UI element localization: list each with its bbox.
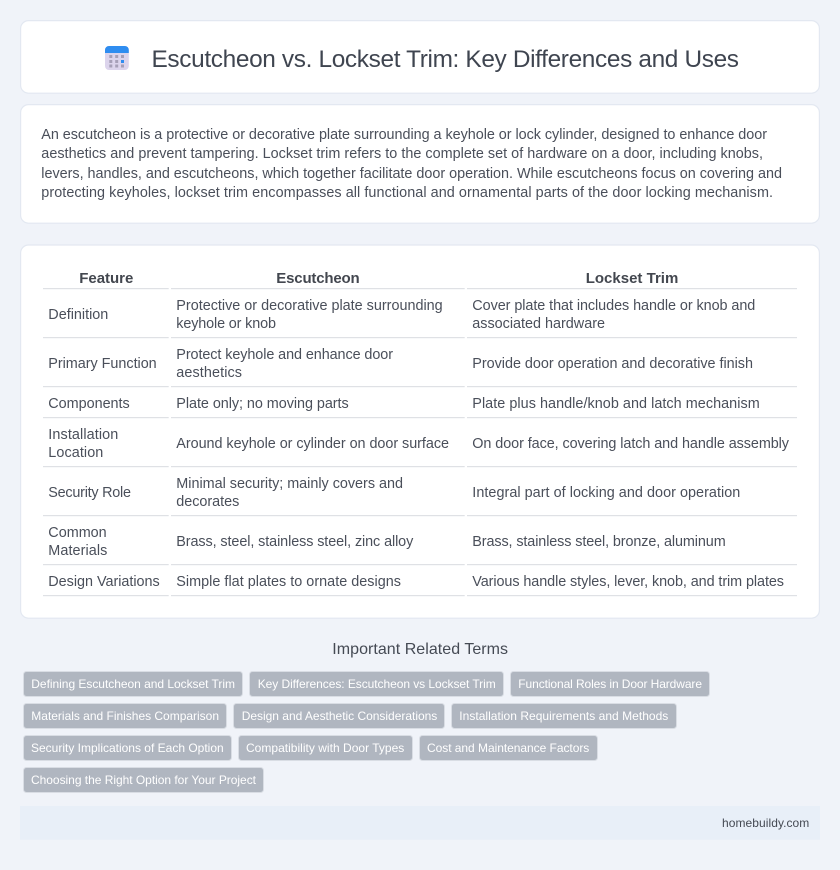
tag: security: Security Implications of Each Option [31,741,224,755]
row: security role [48,476,740,510]
panel: title card [21,21,819,93]
row: definition [48,298,755,332]
tag: materials: Materials and Finishes Comparison [31,709,219,723]
row: primary function: Primary Function [48,356,157,372]
row: components [48,396,760,412]
row: common materials: Brass, stainless steel, bronze, aluminum [472,534,726,550]
tag: materials [24,704,226,728]
intro paragraph [41,127,782,201]
row: definition: Definition [48,307,108,323]
row: components: Components [48,396,130,412]
footer [20,806,820,840]
row: primary function: Provide door operation and decorative finish [472,356,753,372]
row: definition: keyhole or knob [176,316,276,332]
tag: key differences: Key Differences: Escutcheon vs Lockset Trim [258,677,496,691]
tag: design: Design and Aesthetic Considerations [242,709,437,723]
tag: functional roles: Functional Roles in Door Hardware [518,677,702,691]
related term tags [24,672,710,792]
intro paragraph: An escutcheon is a protective or decorative plate surrounding a keyhole or lock cylinder, designed to enhance door [41,127,767,143]
table header: Feature [79,270,133,287]
intro paragraph: levers, handles, and escutcheons, which together facilitate door operation. While escutcheons focus on covering and [41,166,782,182]
title: Escutcheon vs. Lockset Trim: Key Differences and Uses [152,46,739,73]
row: installation location: Installation [48,427,118,443]
tag: defining [24,672,242,696]
table header: Lockset Trim [586,270,678,287]
tag: cost [420,736,598,760]
row: components: Plate plus handle/knob and latch mechanism [472,396,760,412]
icon: calendar [105,46,129,70]
row: common materials: Materials [48,543,107,559]
tag: installation [452,704,676,728]
table header [79,270,678,287]
tag: compatibility [238,736,412,760]
tag: functional roles [510,672,710,696]
row: security role: Minimal security; mainly covers and [176,476,403,492]
row: common materials [48,525,726,559]
related terms heading: Important Related Terms [332,641,508,658]
row: common materials: Common [48,525,107,541]
tag: security [24,736,232,760]
tag: cost: Cost and Maintenance Factors [427,741,589,755]
row: design variations [48,574,784,590]
row: primary function: aesthetics [176,365,242,381]
row: design variations: Design Variations [48,574,160,590]
row: installation location [48,427,790,461]
table header: Escutcheon [276,270,360,287]
panel: introduction [21,105,819,223]
row: definition: Cover plate that includes handle or knob and [472,298,755,314]
tag: compatibility: Compatibility with Door Types [246,741,404,755]
row: design variations: Various handle styles, lever, knob, and trim plates [472,574,784,590]
tag: choosing [24,768,264,792]
row: primary function [48,347,753,381]
row: definition: Protective or decorative plate surrounding [176,298,443,314]
row: installation location: On door face, covering latch and handle assembly [472,436,790,452]
footer: homebuildy.com [722,816,809,830]
tag: defining: Defining Escutcheon and Lockset Trim [31,677,235,691]
tag: choosing: Choosing the Right Option for Your Project [31,773,257,787]
tag: design [234,704,444,728]
row: definition: associated hardware [472,316,605,332]
table rules [43,288,797,596]
intro paragraph: aesthetics and prevent tampering. Lockset trim refers to the complete set of hardware on a door, including knobs, [41,146,763,162]
row: installation location: Around keyhole or cylinder on door surface [176,436,449,452]
row: security role: decorates [176,494,239,510]
row: primary function: Protect keyhole and enhance door [176,347,393,363]
row: common materials: Brass, steel, stainless steel, zinc alloy [176,534,414,550]
intro paragraph: protecting keyholes, lockset trim encompasses all functional and ornamental parts of the door locking mechanism. [41,185,773,201]
panel: comparison table [21,245,819,618]
row: components: Plate only; no moving parts [176,396,349,412]
row: design variations: Simple flat plates to ornate designs [176,574,401,590]
tag: key differences [250,672,504,696]
row: security role: Security Role [48,485,131,501]
row: security role: Integral part of locking and door operation [472,485,740,501]
tag: installation: Installation Requirements and Methods [459,709,668,723]
row: installation location: Location [48,445,103,461]
